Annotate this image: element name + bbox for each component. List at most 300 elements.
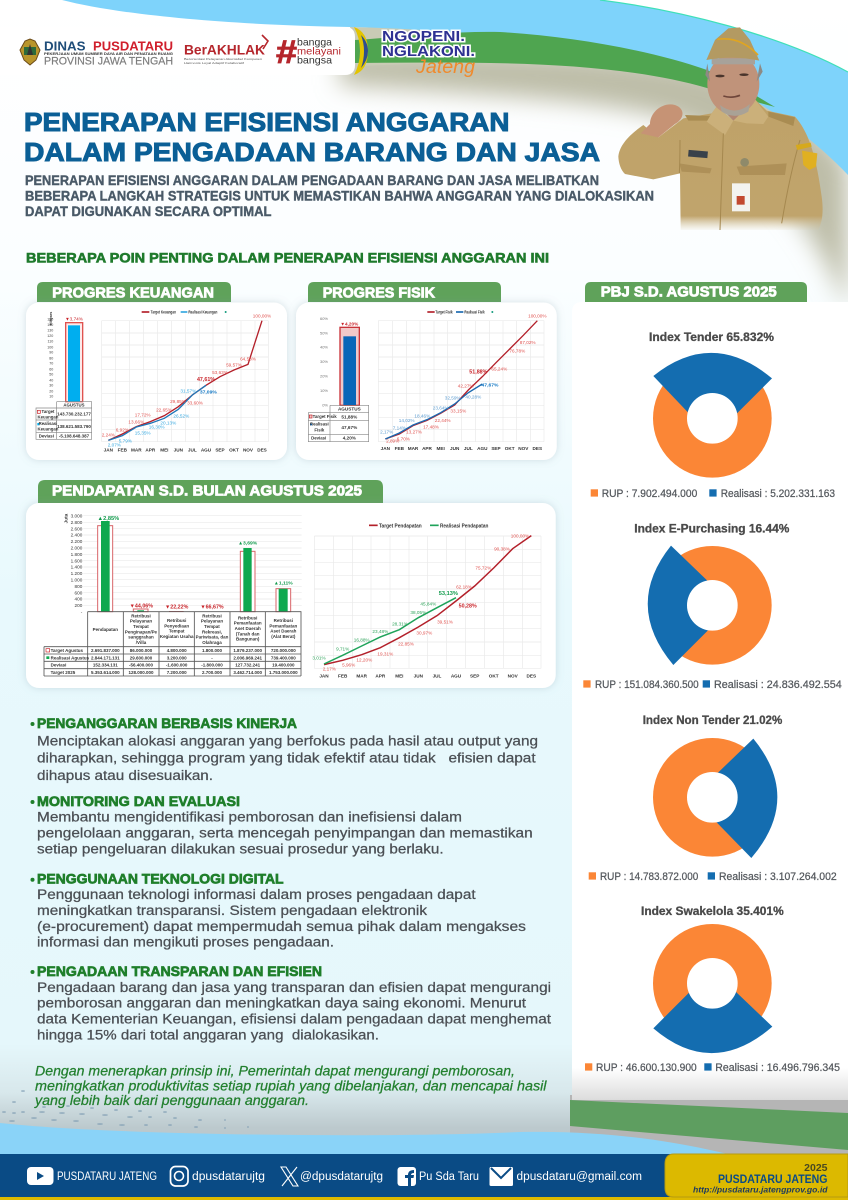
intro text: BEBERAPA LANGKAH STRATEGIS UNTUK MEMASTIKAN BAHWA ANGGARAN YANG DIALOKASIKAN [25,188,654,204]
line chart: MAR [131,447,142,452]
bar chart: 90 [49,351,53,355]
bar chart and table: 2.600 [71,526,83,531]
chart: index swakelola [585,904,840,1074]
line chart: 51,88% [469,370,488,376]
line chart: 9,71% [336,647,349,652]
bar chart and table: Bangunan) [236,637,260,642]
logo: bangga melayani bangsa: melayani [297,46,341,58]
bar chart: Fisik [314,428,325,433]
line chart: 100,00% [253,313,271,318]
line chart: 15,35% [135,430,151,435]
card [26,302,287,460]
bar chart: 140 [47,323,53,327]
text block: monitoring dan evaluasi: pengelolaan anggaran, serta mencegah penyimpangan dan memastikan [37,826,533,841]
chart: index swakelola: RUP : 46.600.130.900 [596,1062,697,1074]
bar chart and table: 128.000.000 [129,670,154,675]
bar chart and table: (Tanah dan [236,631,260,636]
bar chart: 4,20% [343,436,357,441]
line chart: SEP [215,447,225,452]
bar chart and table: 2.800 [71,520,83,525]
bar chart: 40% [320,345,328,350]
chart: index swakelola: Realisasi : 16.496.796.345 [715,1062,840,1074]
bar chart and table: 2.200 [71,539,83,544]
line chart: 13,66% [128,419,144,424]
line chart: Realisasi Keuangan [188,310,217,315]
line chart: JUN [174,447,184,452]
bar chart and table: 1.400 [71,565,83,570]
line chart: 37,09% [200,390,217,396]
bar chart and table: /Villa [136,640,147,645]
banner [585,282,807,302]
line chart: 33,60% [187,400,203,405]
bar chart and table: 720.000.000 [271,648,296,653]
line chart: APR [145,447,156,452]
logo: BerAKHLAK: BerAKHLAK [184,42,265,58]
line chart: 90,38% [494,546,510,551]
bar chart: ▼4,20% [340,322,359,327]
bar chart and table: Tempat [133,624,149,629]
line chart: 33,15% [450,408,466,413]
top swooshes [62,0,848,310]
line chart: 31,57% [180,388,196,393]
logo text: Dinas Pusdataru: PEKERJAAN UMUM SUMBER DAYA AIR DAN PENATAAN RUANG [44,52,173,56]
bar chart and table: 2.400 [71,533,83,538]
closing statement [34,1064,548,1108]
line chart: JUL [464,446,473,451]
bar chart: Target [42,409,55,414]
line chart: 23,48% [372,629,388,634]
line chart: MEI [437,446,445,451]
bar chart: AGUSTUS [338,407,361,412]
line chart: 2,17% [323,666,336,671]
bar chart and table: Penyediaan [164,623,189,628]
lower right green stripe [570,1100,848,1150]
fist [641,104,682,137]
chart: index non tender: Index Non Tender 21.02% [643,713,783,727]
line chart: 26,52% [173,414,189,419]
line chart: 28,31% [392,621,408,626]
chart: index tender: RUP : 7.902.494.000 [602,488,697,500]
bar chart: Realisasi [39,421,57,426]
bar chart and table: 1.000 [71,577,83,582]
card [296,302,557,460]
line chart: DES [533,446,542,451]
bar chart and table: 4.800.000 [167,648,187,653]
line chart: JUN [414,674,424,679]
bar chart and table: Target Agustus [51,648,84,653]
panel: pbj [572,282,848,1100]
logo: Ngopeni Nglakoni Jateng: NGOPENI. [382,28,465,45]
yellow year box: http://pusdataru.jatengprov.go.id [693,1186,829,1194]
line chart: AGU [451,674,462,679]
chart: index tender [591,330,835,500]
bar chart and table: 2.006.969.241 [233,655,263,660]
bar chart and table: 2.700.000 [202,670,222,675]
line chart: 87,02% [520,340,536,345]
panel: progres keuangan [26,282,287,460]
text block: penggunaan teknologi digital: Penggunaan teknologi informasi dalam proses pengadaan dapat [37,887,476,902]
chart: index e-purchasing: Realisasi : 24.836.492.554 [714,679,842,691]
intro text: DAPAT DIGUNAKAN SECARA OPTIMAL [25,204,272,219]
neck [717,90,755,121]
line chart: NOV [518,446,529,451]
bar chart: 60 [49,367,53,371]
closing statement: yang lebih baik dari penggunaan anggaran. [34,1093,309,1108]
line chart: 39,51% [437,619,453,624]
logo text: Dinas Pusdataru [44,38,173,68]
line chart: 17,48% [423,424,439,429]
bar chart: 50% [320,330,328,335]
logo: Ngopeni Nglakoni Jateng: Jateng [415,57,475,78]
bar chart and table: 2.691.837.000 [91,648,120,653]
facebook text: Pu Sda Taru [419,1171,479,1183]
bar chart and table: 86.000.000 [130,648,153,653]
chart: index swakelola: Index Swakelola 35.401% [641,904,784,918]
title: DALAM PENGADAAN BARANG DAN JASA [24,137,600,167]
bar chart: ▼3,74% [65,317,83,322]
line chart: MAR [408,446,419,451]
logo: bangga melayani bangsa: bangsa [297,54,332,66]
youtube text: PUSDATARU JATENG [57,1171,157,1183]
bar chart: 10% [320,388,328,393]
bar chart and table: ▼66,67% [200,605,224,611]
bar chart and table: -1.800.000 [201,663,223,668]
bar chart and table: 7.200.000 [167,670,187,675]
line chart: 18,46% [414,413,430,418]
charts [36,310,271,452]
bar chart and table: Retribusi [202,613,222,618]
bar chart: 30 [49,384,53,388]
bar chart and table: Pemanfaatan [234,621,262,626]
chart: index tender: Index Tender 65.832% [649,330,774,344]
bar chart: 70 [49,362,53,366]
bar chart and table: 2.000 [71,546,83,551]
bar chart and table: 3.000 [71,513,83,518]
banner: PROGRES KEUANGAN [52,284,214,301]
bar chart and table: Retribusi [274,618,293,623]
bar chart and table: (Alat Berat) [271,634,296,639]
chart: index non tender: RUP : 14.783.872.000 [600,871,698,883]
bar chart: 130 [47,329,53,333]
line chart: 53,63% [212,370,228,375]
face [707,53,759,115]
line chart: JUN [450,446,460,451]
line chart: 32,59% [445,396,461,401]
shoulder patch [802,151,817,170]
bar chart: 10 [49,395,53,399]
line chart: 59,57% [226,363,242,368]
intro text [25,173,654,219]
line chart: 2,24% [102,433,115,438]
bar chart and table: 1.800 [71,552,83,557]
closing statement: Dengan menerapkan prinsip ini, Pemerintah dapat mengurangi pemborosan, [35,1064,515,1079]
card [26,503,556,688]
line chart: SEP [491,446,501,451]
halftone dots [2,1090,249,1129]
line chart: SEP [470,674,479,679]
line chart: 7,14% [393,425,406,430]
line chart: AGU [477,446,488,451]
uniform [618,99,823,230]
line chart: 12,20% [356,657,372,662]
line chart: 22,65% [156,407,172,412]
bar chart and table: ▲3,69% [238,540,258,546]
bar chart and table: 800 [75,584,83,589]
line chart: JUL [188,447,197,452]
logo text: Dinas Pusdataru: PUSDATARU [93,38,173,54]
line chart: 100,00% [511,534,529,539]
line chart: 14,02% [399,418,415,423]
bar chart and table: 152.334.131 [93,663,118,668]
bar chart: 110 [47,340,53,344]
x text: @dpusdatarujtg [300,1171,383,1183]
bar chart and table: -1.600.000 [166,663,188,668]
icon: facebook [398,1167,416,1186]
line chart [102,310,271,452]
icon: x [281,1167,298,1186]
bar chart and table: Aset Daerah [270,629,297,634]
bar chart: Target Fisik [313,414,337,419]
text block: penggunaan teknologi digital [30,871,526,950]
line chart: MEI [395,674,403,679]
bar chart: Miliyars [49,312,53,325]
line chart: NOV [243,447,254,452]
line chart: 76,78% [509,348,525,353]
line chart: 6,92% [116,427,129,432]
panel: progres fisik [296,282,557,460]
mail text: dpusdataru@gmail.com [516,1171,642,1183]
line chart: 13,27% [406,429,422,434]
line chart [378,310,547,451]
bar chart [36,312,92,439]
logo: BerAKHLAK [184,35,268,65]
bar chart and table: 3.462.714.000 [233,670,263,675]
bar chart and table: Pelayanan [130,619,152,624]
line chart: 2,07% [108,442,121,447]
bar chart and table: Pariwisata, dan [196,635,229,640]
line chart: Target Keuangan [151,310,176,315]
bar chart and table: ▲2,85% [98,516,119,522]
bar chart and table: Retribusi [167,618,186,623]
bar chart: 50 [49,373,53,377]
line chart: 17,72% [135,412,151,417]
line chart: DES [257,447,267,452]
text block: monitoring dan evaluasi [30,793,533,857]
bar chart and table: Deviasi [51,663,66,668]
bar chart and table: sanggrahan [128,635,154,640]
bar chart: 80 [49,356,53,360]
line chart: Realisasi Pendapatan [440,523,488,529]
line chart: FEB [395,446,405,451]
bar chart and table: 29.600.000 [130,655,153,660]
line chart: 6,70% [397,437,410,442]
bar chart and table: 600 [75,590,83,595]
intro text: PENERAPAN EFISIENSI ANGGARAN DALAM PENGADAAN BARANG DAN JASA MELIBATKAN [25,173,599,188]
bar chart and table: Juta [63,513,68,523]
line chart: JUL [433,674,442,679]
line chart: JAN [104,447,114,452]
bar chart: Keuangan [38,427,59,432]
bar chart and table: ▼44,06% [130,604,153,610]
bar chart and table: 3.200.000 [167,655,187,660]
bar chart: 150 [47,318,53,322]
bar chart: Keuangan [38,415,59,420]
line chart: NOV [508,674,519,679]
bar chart and table: Kegiatan Usaha [160,634,194,639]
logo: bangga melayani bangsa [276,34,341,70]
text block: monitoring dan evaluasi: MONITORING DAN EVALUASI [37,793,240,809]
yellow crescent [354,27,368,75]
lower right grey backdrop [570,1095,848,1155]
bar chart: 20 [49,389,53,393]
line chart: MAR [356,674,368,679]
line chart: JAN [381,446,391,451]
line chart: APR [422,446,433,451]
bar chart and table: -56.400.000 [129,663,153,668]
line chart: 19,31% [377,652,393,657]
bar chart: -5.108.648.387 [59,434,90,439]
line chart: 50,28% [459,604,477,610]
text block: pengadaan transparan dan efisien [30,963,551,1042]
line chart: 20,13% [160,420,176,425]
bar chart: 0% [322,403,328,408]
chart: index e-purchasing: Index E-Purchasing 16.44% [634,521,790,535]
bar chart and table: Pendapatan [93,627,118,632]
bar chart and table: 5.353.614.000 [91,670,120,675]
icon: Jawa Tengah emblem [20,39,40,65]
text block: penganggaran berbasis kinerja: diharapkan, sehingga program yang tidak efektif atau tidak efisien dapat [37,751,536,766]
line chart: 16,30% [149,424,165,429]
banner: PBJ S.D. AGUSTUS 2025 [601,284,777,301]
icon: youtube [27,1167,54,1185]
line chart: 42,27% [458,383,474,388]
line chart: DES [527,674,536,679]
text block: penganggaran berbasis kinerja: dihapus atau disesuaikan. [37,768,213,783]
banner: PENDAPATAN S.D. BULAN AGUSTUS 2025 [52,483,362,500]
bar chart and table: ▲1,11% [274,581,293,587]
line chart: 64,58% [240,357,256,362]
text block: pengadaan transparan dan efisien: pemborosan anggaran dan meningkatkan daya saing ekonomi. Menurut [37,996,526,1011]
text block: penggunaan teknologi digital: informasi dan mengikuti proses pengadaan. [37,935,334,950]
badge [740,158,749,167]
bar chart and table: 127.732.241 [235,663,261,668]
bar chart and table: Pemanfaatan [269,623,298,628]
line chart: 47,61% [197,377,215,383]
bar chart: 30% [320,359,328,364]
bar chart: Deviasi [39,434,54,439]
bar chart: Realisasi [310,421,329,426]
logo: BerAKHLAK: Berorientasi Pelayanan Akuntabel Kompeten [184,57,262,61]
logo: BerAKHLAK: Harmonis Loyal Adaptif Kolaboratif [184,61,244,65]
line chart: OKT [229,447,239,452]
section heading: BEBERAPA POIN PENTING DALAM PENERAPAN EFISIENSI ANGGARAN INI [26,250,549,266]
line chart: 45,84% [420,601,436,606]
bar chart and table: 2.844.171.131 [91,655,120,660]
line chart: FEB [118,447,128,452]
text block: monitoring dan evaluasi: Membantu mengidentifikasi pemborosan dan inefisiensi dalam [37,810,462,825]
id card [732,183,750,211]
text block: penggunaan teknologi digital: (e-procurement) dapat mempermudah semua pihak dalam mengakses [37,919,526,934]
logo: bangga melayani bangsa: bangga [297,36,332,48]
text block: monitoring dan evaluasi: setiap pengeluaran dilakukan sesuai prosedur yang berlaku. [37,842,444,857]
line chart: 100,00% [528,313,547,318]
bar chart and table: 400 [75,597,83,602]
logo text: Dinas Pusdataru: DINAS [44,38,86,54]
panel: pendapatan [26,480,556,688]
chart: index tender: Realisasi : 5.202.331.163 [721,488,835,500]
bar chart and table: Rekreasi, [202,629,222,634]
line chart: AGU [201,447,212,452]
bar chart: 51,88% [341,414,358,419]
cap [706,27,759,61]
title: PENERAPAN EFISIENSI ANGGARAN [24,107,510,137]
text block: pengadaan transparan dan efisien: data Kementerian Keuangan, efisiensi dalam pengadaan dapat menghemat [37,1012,551,1027]
logo text: Dinas Pusdataru: PROVINSI JAWA TENGAH [44,56,173,68]
line chart: 16,88% [354,638,370,643]
header logo bar [0,27,475,78]
bar chart and table: Tempat [169,629,185,634]
bottom wave [0,1123,732,1155]
closing statement: meningkatkan produktivitas setiap rupiah yang dibelanjakan, dan mencapai hasil [35,1078,548,1093]
banner [38,480,383,503]
text block: pengadaan transparan dan efisien: hingga 15% dari total anggaran yang dialokasikan. [37,1027,379,1042]
bar chart: AGUSTUS [63,403,85,408]
photo: officer in uniform [618,27,823,230]
line chart: 30,97% [416,630,432,635]
bar chart and table: - [211,655,213,660]
bar chart: 60% [320,316,328,321]
bar chart: 100 [47,345,53,349]
line chart: APR [375,674,386,679]
panel background [572,302,848,1100]
bar chart: 143.730.232.177 [57,412,91,417]
line chart: 47,67% [482,383,499,389]
white band [0,27,355,75]
bar chart and table: 200 [75,603,83,608]
bar chart and table: Target 2025 [51,670,76,675]
line chart: 75,72% [475,566,491,571]
logo: Ngopeni Nglakoni Jateng: NGLAKONI. [382,43,475,60]
line chart: OKT [505,446,515,451]
bar chart and table: Penginapan/Pe [125,629,158,634]
bar chart: 40 [49,378,53,382]
chart: index e-purchasing [583,521,842,691]
bar chart and table: Retribusi [238,615,257,620]
chart: index e-purchasing: RUP : 151.084.360.500 [595,679,699,691]
bar chart and table: Tempat [204,624,220,629]
line chart: 22,85% [398,642,414,647]
line chart: 3,01% [312,655,326,660]
bar chart and table: 1.753.000.000 [269,670,298,675]
line chart: FEB [338,674,348,679]
logo: bangga melayani bangsa: # [276,34,297,70]
line chart: Realisasi Fisik [464,310,485,315]
name tag [688,150,708,158]
line chart: MEI [160,447,168,452]
line chart: 62,18% [456,584,472,589]
bar chart and table: Olahraga [202,640,222,645]
chart: index non tender: Realisasi : 3.107.264.002 [719,871,837,883]
logo: Ngopeni Nglakoni Jateng [382,28,475,78]
yellow year box: 2025 [804,1162,828,1174]
bar chart and table: - [81,609,83,614]
title [24,107,600,167]
bar chart and table: Aset Daerah [235,626,261,631]
line chart: 5,96% [342,663,355,668]
line chart: 22,44% [435,418,451,423]
line chart: 53,13% [439,591,458,597]
text block: penganggaran berbasis kinerja: Menciptakan alokasi anggaran yang berfokus pada hasil atau output yang [37,734,538,749]
